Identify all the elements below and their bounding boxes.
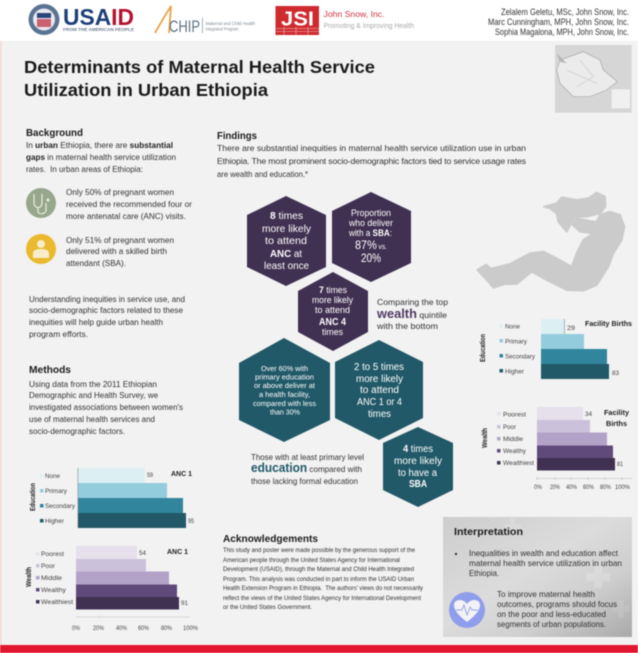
hexagon: 2 to 5 times: times: [368, 409, 391, 420]
understanding inequities text: socio-demographic factors related to these: [29, 305, 183, 315]
hexagon: 2 to 5 times: ANC 1 or 4: [357, 397, 402, 408]
logo: JSI: Promoting & Improving Health: [324, 23, 414, 30]
stat: ANC visits: Only 50% of pregnant women: [66, 187, 174, 197]
chart: ANC 1 by wealth: ANC 1: [167, 547, 188, 556]
logo: USAID: USAID: [63, 4, 134, 30]
acknowledgements text: [223, 547, 424, 611]
findings text: [217, 143, 527, 179]
chart: ANC 1 by wealth: 20%: [93, 625, 104, 632]
title: Utilization in Urban Ethiopia: [24, 80, 268, 100]
map of Ethiopia: [555, 45, 632, 113]
chart: facility births by education: Secondary: [505, 354, 536, 360]
chart: facility births by wealth: Wealth: [482, 428, 489, 448]
stat: skilled birth attendant: attendant (SBA).: [66, 258, 126, 268]
hexagon: 7 times ANC 4: times: [322, 327, 344, 337]
chart: facility births by wealth: Wealthy: [503, 448, 527, 455]
acknowledgements text: or the United States Government.: [223, 604, 312, 611]
hexagon: SBA proportion: 20%: [361, 253, 381, 265]
caption: wealth comparison: with the bottom: [376, 321, 438, 331]
caption: wealth comparison: wealth quintile: [376, 307, 447, 321]
stat: ANC visits: received the recommended four or: [66, 199, 192, 209]
chart: facility births by wealth: Facility: [604, 408, 630, 417]
hexagon: SBA proportion: with a SBA:: [348, 228, 392, 238]
chart: facility births by education: Primary: [505, 338, 528, 346]
hexagon: 60 percent facility delivery: or above deliver at: [254, 381, 316, 390]
logo: USAID: FROM THE AMERICAN PEOPLE: [63, 27, 134, 32]
authors: [488, 7, 629, 37]
chart: ANC 1 by wealth: 91: [181, 600, 188, 607]
findings text: Ethiopia. The most prominent socio-demographic factors tied to service usage rates: [217, 156, 527, 166]
hexagon: SBA proportion: [332, 192, 411, 282]
hexagon: 2 to 5 times: to attend: [360, 385, 399, 396]
recommendation text: [497, 589, 618, 629]
caption: wealth comparison: Comparing the top: [377, 297, 448, 307]
logo: JSI: John Snow, Inc.: [324, 9, 384, 19]
interpretation bullet text: [469, 548, 622, 578]
stat: skilled birth attendant: [66, 235, 174, 268]
chart: facility births by wealth: 60%: [583, 484, 594, 491]
chart: ANC 1 by education: None: [45, 473, 60, 480]
panel: interpretation: [443, 517, 632, 637]
hexagon: 8 times ANC: to attend: [265, 235, 307, 247]
chart: ANC 1 by education: [30, 468, 194, 528]
hexagon: 2 to 5 times: 2 to 5 times: [354, 362, 404, 373]
caption: education comparison: [251, 452, 364, 486]
recommendation text: segments of urban populations.: [497, 619, 606, 629]
chart: ANC 1 by wealth: 40%: [116, 625, 127, 632]
chart: facility births by wealth: 20%: [550, 484, 560, 491]
bottom red bar: [0, 645, 638, 653]
chart: facility births by wealth: [482, 407, 632, 491]
hexagon: SBA proportion: 87% vs.: [355, 240, 387, 252]
chart: facility births by education: 29: [567, 325, 575, 332]
icon: heart with pulse: [449, 592, 485, 628]
hexagon: 2 to 5 times: more likely: [356, 374, 403, 385]
chart: facility births by education: Higher: [505, 368, 525, 376]
chart: ANC 1 by wealth: Wealth: [26, 567, 33, 587]
methods text: socio-demographic factors.: [29, 426, 125, 436]
background text: rates. In urban areas of Ethiopia:: [26, 164, 143, 174]
hexagon: 4 times SBA: more likely: [394, 456, 442, 467]
title: [24, 57, 375, 100]
recommendation text: To improve maternal health: [497, 589, 595, 599]
chart: ANC 1 by education: Education: [30, 483, 37, 511]
heading: background: Background: [26, 127, 83, 139]
hexagon: 60 percent facility delivery: compared with less: [253, 399, 316, 408]
acknowledgements text: This study and poster were made possible by the generous support of the: [223, 547, 416, 554]
hexagon: 7 times ANC 4: to attend: [315, 305, 350, 315]
understanding inequities text: [29, 294, 185, 339]
chart: facility births by wealth: 34: [585, 411, 592, 418]
logo: MCHIP: Integrated Program: [206, 26, 239, 32]
methods text: Demographic and Health Survey, we: [29, 390, 158, 400]
methods text: use of maternal health services and: [29, 414, 155, 424]
chart: facility births by wealth: Middle: [503, 436, 523, 443]
logo: MCHIP: CHIP: [169, 17, 200, 36]
logo: MCHIP: [155, 6, 256, 36]
icon: birth attendant: [26, 234, 56, 264]
panel: acknowledgements: [223, 533, 424, 611]
hexagon: 60 percent facility delivery: than 30%: [270, 408, 300, 416]
chart: ANC 1 by education: 59: [147, 472, 153, 479]
findings text: There are substantial inequities in maternal health service utilization use in urban: [217, 143, 526, 153]
hexagon: 4 times SBA: to have a: [398, 468, 437, 479]
stat: ANC visits: [66, 187, 192, 221]
chart: facility births by wealth: 100%: [615, 484, 630, 491]
acknowledgements text: Development (USAID), through the Maternal and Child Health Integrated: [223, 566, 415, 573]
silhouette: mother lifting child: [477, 193, 624, 291]
bullet: [455, 553, 457, 555]
logo: JSI: [276, 6, 414, 35]
interpretation bullet text: Ethiopia.: [469, 568, 499, 578]
hexagon: 8 times ANC: 8 times: [270, 210, 303, 222]
heading: interpretation: Interpretation: [454, 526, 523, 538]
left accent line: [0, 41, 2, 645]
chart: ANC 1 by wealth: [26, 546, 198, 632]
methods text: Using data from the 2011 Ethiopian: [29, 379, 157, 389]
acknowledgements text: American people through the United States Agency for International: [223, 557, 400, 564]
hexagon: 4 times SBA: SBA: [409, 479, 427, 490]
heading: methods: Methods: [29, 364, 71, 376]
heading: findings: Findings: [217, 130, 257, 142]
caption: wealth comparison: [376, 297, 448, 331]
stat: skilled birth attendant: delivered with a skilled birth: [66, 246, 167, 256]
chart: ANC 1 by wealth: 80%: [161, 625, 172, 632]
panel: methods: [29, 364, 184, 436]
chart: facility births by wealth: 0%: [534, 484, 542, 491]
chart: ANC 1 by education: Higher: [45, 518, 65, 525]
chart: ANC 1 by education: 95: [188, 518, 194, 525]
chart: ANC 1 by wealth: Poor: [41, 563, 56, 570]
hexagon: 4 times SBA: 4 times: [403, 444, 433, 455]
chart: ANC 1 by wealth: Poorest: [41, 551, 64, 558]
hexagon: 4 times SBA: [383, 427, 453, 507]
caption: education comparison: education compared with: [251, 461, 362, 475]
understanding inequities text: Understanding inequities in service use, and: [29, 294, 185, 304]
hexagon: 8 times ANC: least once: [264, 260, 309, 272]
hexagon: 8 times ANC: more likely: [262, 223, 312, 235]
methods text: [29, 379, 184, 436]
hexagon: 60 percent facility delivery: a health facility,: [259, 390, 310, 399]
panel: background: [26, 127, 192, 339]
caption: education comparison: Those with at least primary level: [251, 452, 364, 462]
hexagon: 60 percent facility delivery: primary education: [255, 372, 314, 382]
chart: ANC 1 by wealth: Wealthy: [41, 587, 67, 594]
chart: facility births by education: 83: [612, 370, 619, 377]
hexagon: 2 to 5 times: [335, 340, 423, 440]
chart: facility births by education: [480, 319, 632, 379]
hexagon: 8 times ANC: [247, 196, 326, 286]
chart: ANC 1 by education: Secondary: [45, 503, 76, 510]
chart: facility births by education: None: [505, 324, 520, 330]
title: Determinants of Maternal Health Service: [24, 57, 375, 77]
stat: skilled birth attendant: Only 51% of pregnant women: [66, 235, 174, 245]
chart: ANC 1 by wealth: 60%: [138, 625, 149, 632]
panel: findings: [217, 130, 527, 179]
hexagon: 8 times ANC: ANC at: [270, 248, 302, 260]
chart: ANC 1 by wealth: Wealthiest: [41, 599, 73, 606]
recommendation text: outcomes, programs should focus: [497, 599, 618, 609]
interpretation bullet text: maternal health service utilization in urban: [469, 558, 622, 568]
chart: ANC 1 by wealth: 0%: [72, 625, 80, 632]
logo: USAID: [28, 4, 134, 35]
recommendation text: on the poor and less-educated: [497, 609, 606, 619]
logo: JSI: JSI: [281, 8, 314, 30]
chart: facility births by wealth: Births: [606, 419, 627, 428]
icon: stethoscope: [26, 188, 56, 218]
chart: facility births by wealth: Wealthiest: [503, 460, 534, 467]
logo: MCHIP: Maternal and Child Health: [206, 21, 256, 26]
acknowledgements text: reflect the views of the United States Agency for International Development: [223, 595, 421, 602]
chart: facility births by wealth: 40%: [566, 484, 577, 491]
understanding inequities text: program efforts.: [29, 329, 88, 339]
background text: [26, 140, 176, 174]
hexagon: 60 percent facility delivery: Over 60% with: [261, 364, 308, 373]
hexagon: SBA proportion: who deliver: [348, 218, 393, 228]
findings text: are wealth and education.*: [217, 169, 309, 179]
chart: facility births by wealth: Poor: [503, 424, 517, 431]
hexagon: SBA proportion: Proportion: [351, 208, 391, 218]
acknowledgements text: Program. This analysis was conducted in part to inform the USAID Urban: [223, 576, 415, 583]
acknowledgements text: Health Extension Program in Ethiopia. The authors' views do not necessarily: [223, 585, 424, 592]
stat: ANC visits: more antenatal care (ANC) visits.: [66, 211, 186, 221]
understanding inequities text: inequities will help guide urban health: [29, 317, 163, 327]
methods text: investigated associations between women's: [29, 402, 184, 412]
hexagon: 7 times ANC 4: ANC 4: [319, 317, 346, 328]
interpretation bullet text: Inequalities in wealth and education affect: [469, 548, 619, 558]
hexagon: 7 times ANC 4: 7 times: [319, 285, 348, 295]
background text: gaps in maternal health service utilization: [26, 152, 176, 162]
hexagon: 7 times ANC 4: [298, 272, 368, 351]
caption: education comparison: those lacking formal education: [251, 476, 358, 486]
hexagon: 7 times ANC 4: more likely: [312, 295, 354, 305]
background text: In urban Ethiopia, there are substantial: [26, 140, 173, 150]
chart: facility births by wealth: 80%: [600, 484, 611, 491]
chart: facility births by education: Facility Births: [585, 319, 632, 328]
chart: facility births by wealth: 81: [617, 461, 623, 468]
chart: facility births by wealth: Poorest: [503, 412, 526, 418]
chart: ANC 1 by wealth: 100%: [183, 625, 198, 632]
heading: acknowledgements: Acknowledgements: [223, 533, 318, 545]
chart: ANC 1 by wealth: Middle: [41, 575, 62, 582]
chart: ANC 1 by education: ANC 1: [171, 469, 192, 478]
chart: ANC 1 by wealth: 54: [139, 550, 146, 557]
chart: facility births by education: Education: [480, 334, 487, 362]
chart: ANC 1 by education: Primary: [45, 488, 68, 495]
hexagon: 60 percent facility delivery: [239, 338, 330, 442]
